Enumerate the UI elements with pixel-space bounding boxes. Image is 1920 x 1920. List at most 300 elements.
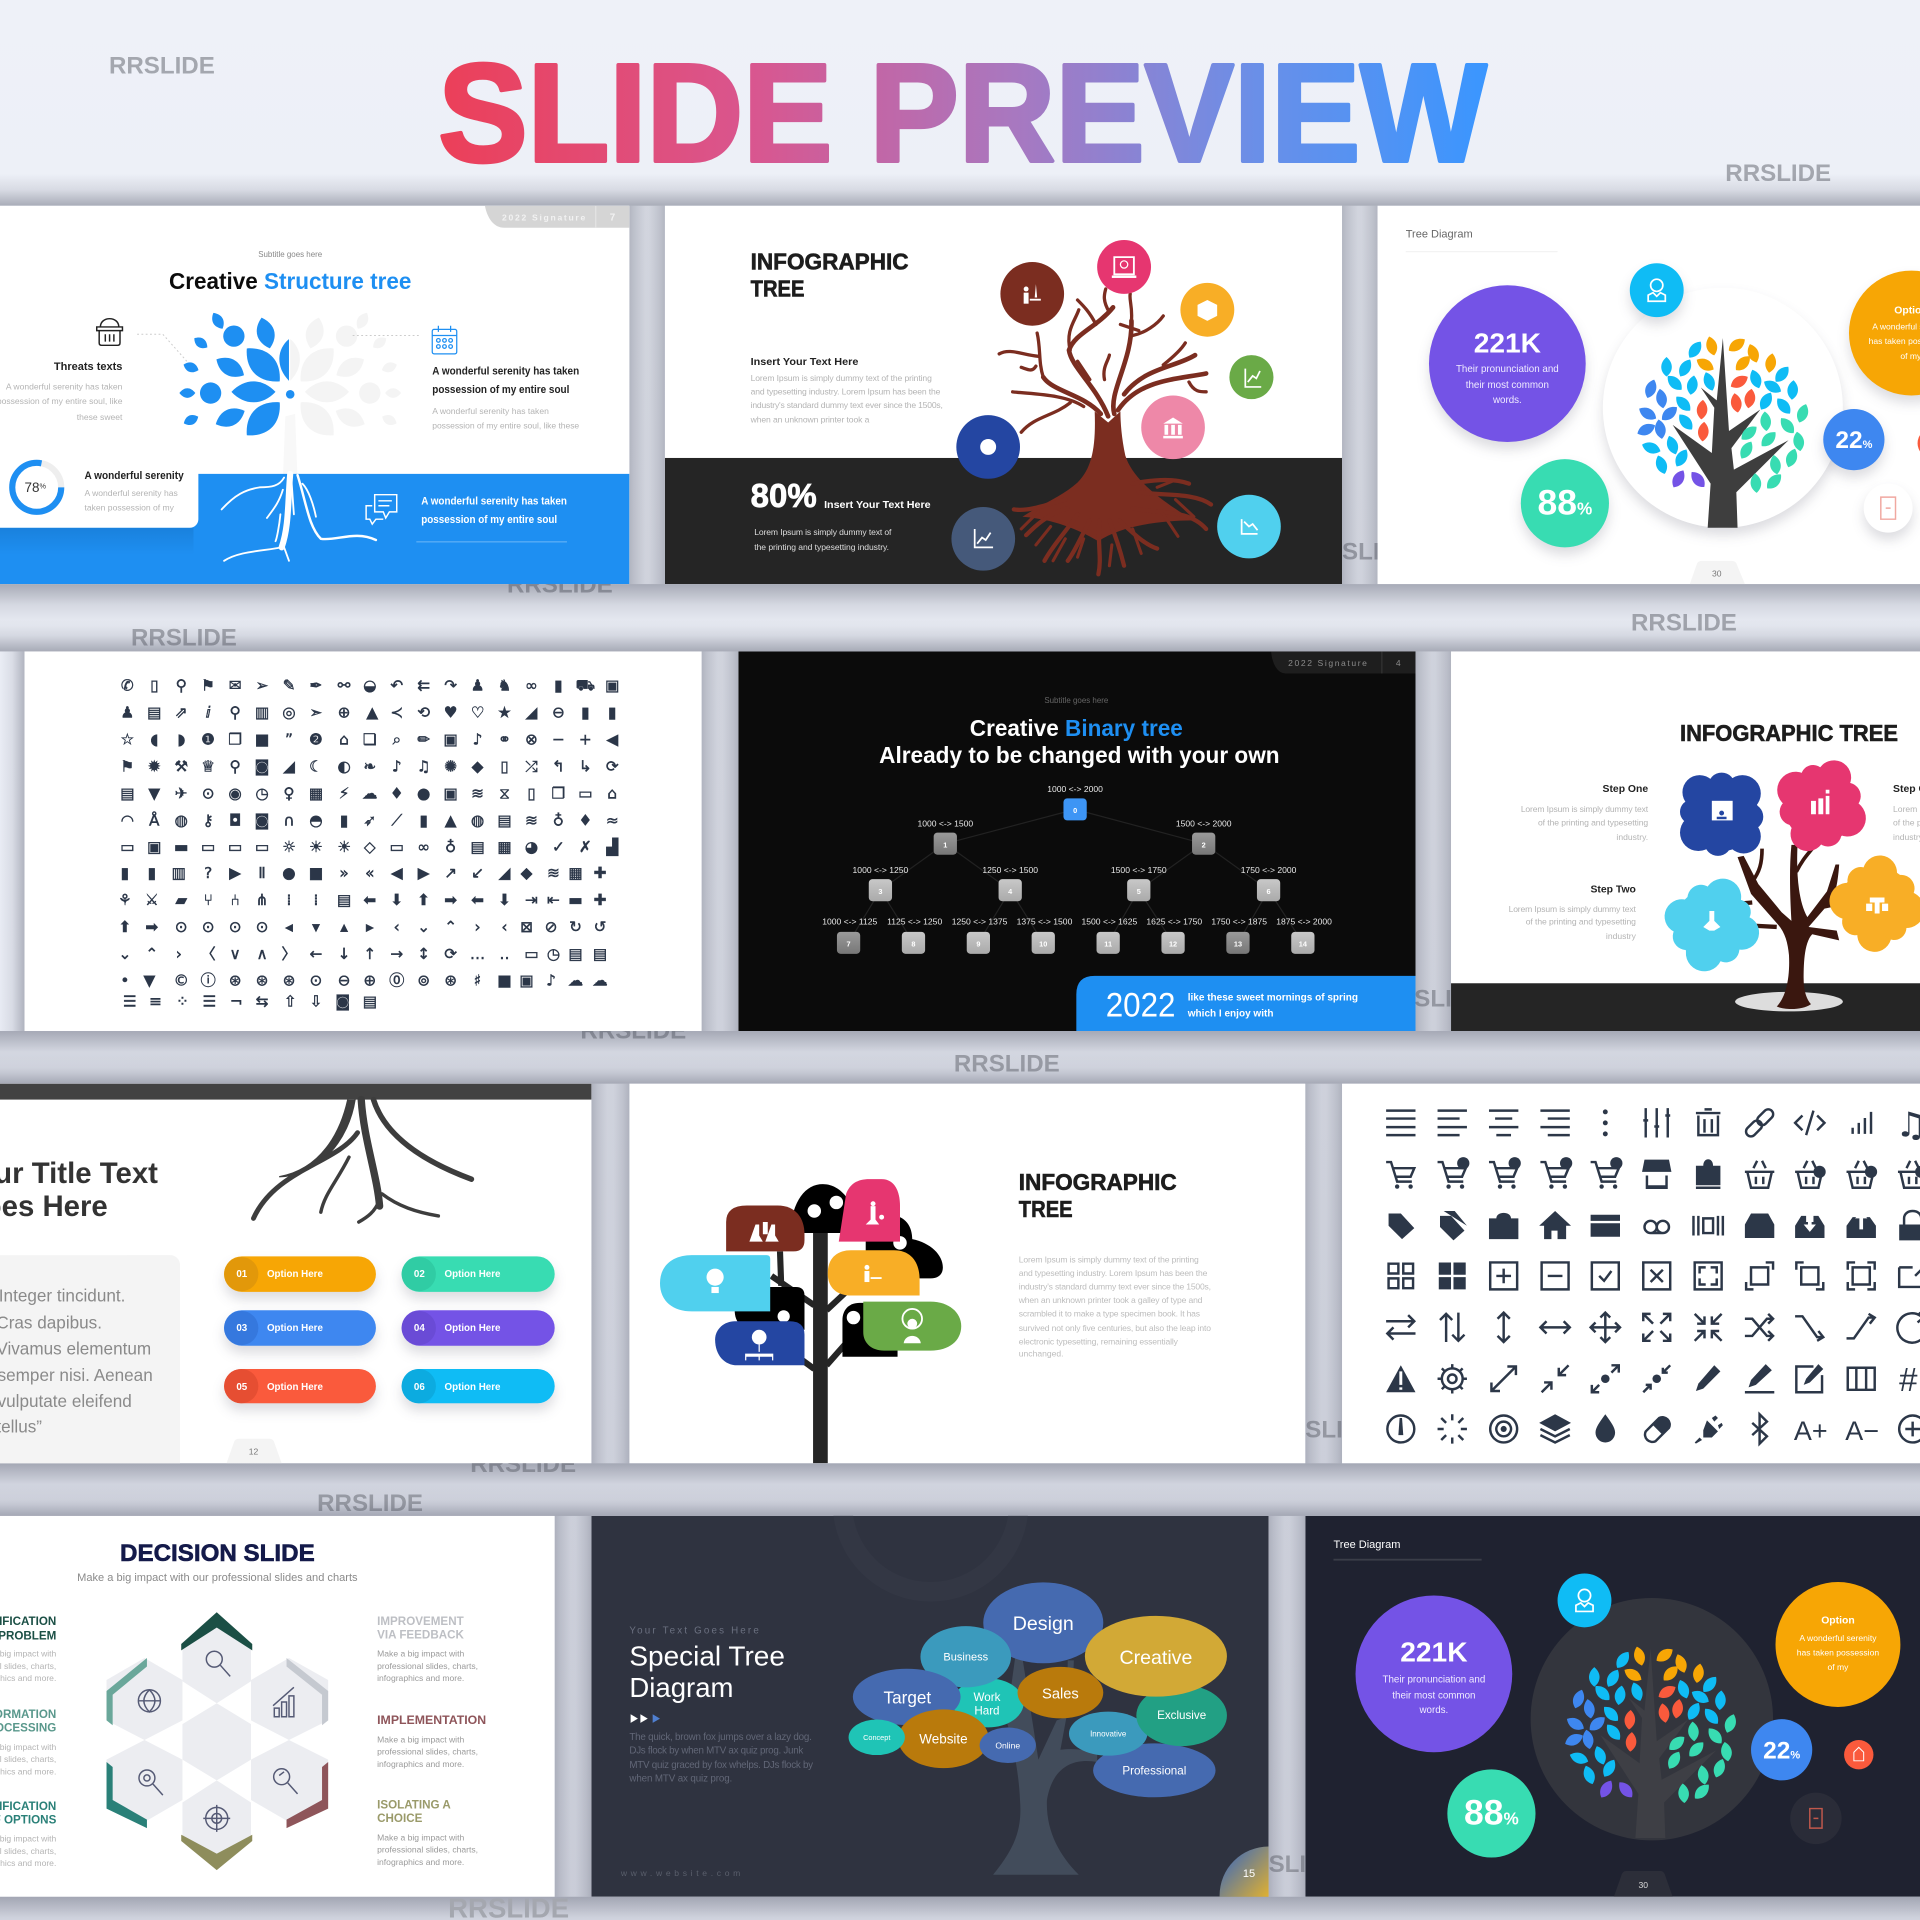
right column text: professional slides, charts,: [377, 1747, 478, 1757]
binary tree labels: 1000 <-> 1500: [917, 819, 973, 829]
quote card: Integer tincidunt.: [0, 1286, 125, 1306]
black leaf lower right: [842, 1303, 898, 1357]
step right text: [1893, 784, 1920, 842]
card: 78 percent: 78: [24, 480, 39, 495]
page tab: 12: [249, 1447, 258, 1457]
pill 05: 05: [236, 1382, 248, 1393]
right column text: ISOLATING A: [377, 1799, 451, 1812]
text block: survived not only five centuries, but also the leap into: [1019, 1323, 1211, 1333]
quote card: Vivamus elementum: [0, 1338, 151, 1358]
icon grid: •▼©ⓘ⊛⊛⊛⊙⊖⊕⓪⊚⊛♯■▣♪☁☁: [120, 972, 608, 990]
icon grid: ◠Å◍⚷◘◙∩◓▮➶⟋▮▲◍▤≋♁♦≈: [121, 810, 619, 829]
circle: brown: [1000, 262, 1064, 326]
stat: 88 percent: 88%: [1464, 1792, 1519, 1832]
binary tree nodes: 10: [1039, 940, 1047, 949]
text block: and typesetting industry. Lorem Ipsum has been the: [751, 386, 941, 396]
slide tab: [485, 206, 629, 228]
pill 02: [402, 1256, 555, 1292]
blue and grey leaves: [179, 310, 401, 444]
text: serenity: possession of my entire soul, like these: [432, 421, 579, 431]
text block: industry's standard dummy text ever since the 1500s,: [1019, 1281, 1211, 1291]
stat 80 percent: Lorem Ipsum is simply dummy text of: [754, 527, 892, 537]
panel: small icon grid slide: [24, 651, 702, 1031]
stat: 221K: 221K: [1400, 1637, 1468, 1668]
callout 2022: which I enjoy with: [1187, 1008, 1273, 1019]
icon grid: ▭▣▬▭▭▭☼☀☀◇▭∞♁▤▦◕✓✗▟: [120, 837, 618, 856]
callout 2022: 2022: [1106, 986, 1176, 1024]
icon row 4: [1389, 1262, 1920, 1289]
text: kicker: Your Text Goes Here: [629, 1625, 760, 1636]
heading: [1019, 1169, 1177, 1222]
bubble: professional: Professional: [1122, 1764, 1186, 1777]
option pills: [224, 1256, 555, 1403]
watermarks: SLI: [1342, 539, 1380, 566]
stat 80 percent: Insert Your Text Here: [824, 500, 931, 511]
binary tree labels: 1000 <-> 2000: [1047, 784, 1103, 794]
bubble: online: Online: [995, 1741, 1020, 1751]
binary tree labels: 1250 <-> 1500: [982, 865, 1038, 875]
callout 2022: [1076, 976, 1416, 1031]
page corner: 15: [1243, 1868, 1255, 1880]
icon: magnifier left: [139, 1770, 163, 1795]
text block: DJs flock by when MTV ax quiz prog. Junk: [629, 1745, 803, 1756]
icon grid: ⌄⌃›〈∨∧〉←↓↑→↕⟳…‥▭◷▤▤: [118, 945, 607, 963]
binary tree nodes: 7: [847, 940, 851, 949]
leaf: green: [863, 1302, 961, 1351]
watermarks: RRSLIDE: [507, 572, 613, 599]
text block: Insert Your Text Here: [751, 357, 859, 368]
bubble: work hard: [953, 1678, 1024, 1727]
right column text: infographics and more.: [377, 1857, 464, 1867]
right column text: infographics and more.: [377, 1759, 464, 1769]
heading: TREE: [751, 275, 804, 301]
binary tree labels: 1875 <-> 2000: [1276, 916, 1332, 926]
panel: infographic tree blobs slide: [1451, 651, 1920, 1031]
pill 02: 02: [414, 1269, 425, 1280]
bubble: creative: [1085, 1616, 1227, 1697]
blob: navy: [1680, 773, 1763, 856]
text: threats: these sweet: [77, 412, 123, 422]
bubble: sales: [1018, 1667, 1103, 1718]
binary tree nodes: 3: [878, 887, 882, 896]
heading: INFOGRAPHIC: [1019, 1169, 1177, 1195]
step two text: industry: [1606, 931, 1637, 941]
panel: decision slide: [0, 1516, 555, 1897]
bubble: target: [853, 1669, 961, 1725]
stat: 221K: their most common: [1466, 380, 1549, 391]
icon: target: [203, 1805, 230, 1832]
pill 02: Option Here: [444, 1269, 501, 1280]
binary tree labels: 1750 <-> 1875: [1211, 916, 1267, 926]
arrows: [631, 1714, 648, 1723]
text block: [1018, 1254, 1211, 1359]
panel: large icon grid slide: [1342, 1084, 1920, 1463]
card: 78 percent: A wonderful serenity: [84, 470, 184, 482]
binary tree nodes: [837, 798, 1314, 954]
stat 80 percent: the printing and typesetting industry.: [754, 542, 889, 552]
leaf: yellow: [828, 1250, 920, 1296]
quote card: vulputate eleifend: [0, 1391, 132, 1411]
watermarks: RRSLIDE: [1631, 610, 1737, 637]
stat: 88 percent: 88%: [1538, 482, 1592, 522]
text: band: A wonderful serenity has taken: [421, 495, 567, 507]
right column text: IMPLEMENTATION: [377, 1714, 486, 1727]
option circle: of my: [1827, 1662, 1849, 1672]
right column text: professional slides, charts,: [377, 1845, 478, 1855]
watermarks: RRSLIDE: [109, 52, 215, 79]
subtitle: Subtitle goes here: [258, 250, 323, 259]
heading: Already to be changed with your own: [879, 742, 1280, 768]
binary tree nodes: 0: [1073, 806, 1077, 815]
panel: binary tree slide: [738, 651, 1416, 1031]
label: Tree Diagram: [1333, 1539, 1400, 1551]
stat: 221K: their most common: [1392, 1690, 1475, 1701]
card: 78 percent: taken possession of my: [84, 503, 175, 513]
heading: INFOGRAPHIC TREE: [1680, 720, 1898, 746]
step two text: [1509, 885, 1637, 941]
bubble: business: Business: [943, 1651, 989, 1663]
page tab: 30: [1638, 1880, 1648, 1890]
bubble: website: Website: [919, 1732, 968, 1747]
big circle with tree: [1598, 336, 1847, 540]
slide tab: 2022 Signature: [502, 212, 587, 222]
card: 78 percent: A wonderful serenity has: [84, 488, 178, 498]
title: SLIDE PREVIEW: [438, 35, 1487, 191]
watermarks: SLI: [1305, 1417, 1343, 1444]
circle: green: [1229, 355, 1273, 399]
tree stem: [771, 1233, 845, 1463]
icon grid: [118, 677, 619, 1011]
bubble: work hard: Work: [973, 1691, 1001, 1704]
icon: chat: [366, 495, 397, 524]
stat: 22 percent: [1823, 409, 1884, 470]
watermarks: RRSLIDE: [470, 1451, 576, 1478]
icon grid: ♟▤⇗ⅈ⚲▥◎➣⊕▲≺⟲♥♡★◢⊖▮▮: [120, 704, 616, 722]
bubble: work hard: Hard: [974, 1704, 1000, 1717]
text: band: [421, 495, 567, 526]
icon row 7: A−: [1845, 1416, 1879, 1446]
pill 04: [402, 1310, 555, 1346]
watermarks: RRSLIDE: [317, 1490, 423, 1517]
blob: yellow: [1818, 845, 1920, 962]
circle: slate: [951, 507, 1015, 571]
website text: www.website.com: [620, 1868, 744, 1878]
icon row 5: [1386, 1313, 1920, 1343]
binary tree nodes: 4: [1008, 887, 1013, 896]
icon grid: ✆▯⚲⚑✉➢✎✒⚯◒↶⇇↷♟♞∞▮⛟▣: [121, 677, 619, 695]
stat: 88 percent: [1521, 459, 1609, 547]
icon row 2: [1386, 1157, 1920, 1189]
black leaf right: [866, 1215, 943, 1278]
page tab: [1690, 561, 1745, 584]
binary tree labels: 1125 <-> 1250: [887, 916, 942, 926]
leaf: navy: [715, 1321, 804, 1365]
binary tree labels: 1000 <-> 1250: [853, 865, 908, 875]
right column text: IMPROVEMENT: [377, 1615, 464, 1628]
dotted connector left: [137, 334, 187, 362]
bubble: design: [983, 1582, 1103, 1663]
text: serenity: A wonderful serenity has taken: [432, 406, 549, 416]
left column text: [0, 1615, 57, 1868]
icon circle: red: [1844, 1740, 1873, 1769]
panel: tree diagram light slide: [1378, 206, 1920, 584]
pill 06: [402, 1369, 555, 1403]
dotted connector right: [352, 335, 419, 336]
stat: 88 percent: [1447, 1769, 1536, 1858]
watermarks: SLI: [1414, 986, 1452, 1013]
binary tree nodes: 9: [976, 940, 980, 949]
subheading: Make a big impact with our professional slides and charts: [77, 1572, 358, 1584]
bubble: concept: Concept: [863, 1733, 890, 1742]
bubble: creative: Creative: [1119, 1647, 1192, 1669]
page tab: 30: [1712, 569, 1722, 579]
bubble: target: Target: [884, 1687, 931, 1707]
option circle: A wonderful serenity: [1799, 1633, 1877, 1643]
option circle: [1776, 1582, 1900, 1707]
blob: cyan: [1655, 868, 1769, 981]
tree trunk: [1738, 845, 1839, 1009]
binary tree nodes: 1: [943, 840, 947, 849]
pill 03: [224, 1310, 376, 1346]
stat: 221K: Their pronunciation and: [1456, 364, 1559, 375]
icon row 1: [1386, 1105, 1920, 1145]
stat: 221K: [1356, 1596, 1512, 1752]
watermarks: RRSLIDE: [131, 624, 237, 651]
step one text: of the printing and typesetting: [1538, 817, 1648, 827]
heading: INFOGRAPHIC: [751, 248, 909, 274]
icon circle: white: [1864, 484, 1913, 533]
heading: [750, 253, 908, 297]
icon: magnifier right: [274, 1769, 298, 1794]
binary tree labels: 1625 <-> 1750: [1146, 916, 1202, 926]
pill 05: Option Here: [267, 1382, 323, 1393]
panel: creative structure tree slide: [0, 206, 629, 584]
panel: tree diagram dark slide: [1305, 1516, 1920, 1897]
text block: unchanged.: [1019, 1349, 1064, 1359]
slide tab: [1271, 651, 1416, 673]
right column text: professional slides, charts,: [377, 1661, 478, 1671]
pill 01: Option Here: [267, 1269, 323, 1280]
stat: 22 percent: 22%: [1763, 1737, 1800, 1764]
text: threats: Threats texts: [54, 361, 122, 373]
heading: Diagram: [629, 1672, 733, 1703]
option circle: Option: [1821, 1616, 1855, 1627]
stat: 22 percent: 22%: [1835, 427, 1873, 454]
tree base shadow: [1735, 992, 1843, 1011]
text block: electronic typesetting, remaining essentially: [1019, 1336, 1179, 1346]
text block: Lorem Ipsum is simply dummy text of the printing: [1019, 1254, 1199, 1264]
text block: [628, 1732, 813, 1785]
right column text: Make a big impact with: [377, 1832, 464, 1842]
text: serenity: [432, 366, 579, 431]
bubble: professional: [1093, 1743, 1216, 1797]
watermarks: RRSLIDE: [1725, 160, 1831, 187]
grey tree trunk: [283, 414, 298, 480]
icon circle: dark: [1790, 1793, 1842, 1844]
circle: pink: [1097, 240, 1151, 294]
bubble: website: [898, 1709, 989, 1768]
slide tab: 4: [1396, 658, 1401, 668]
icon row 3: [1389, 1211, 1920, 1240]
heading: TREE: [1019, 1196, 1073, 1222]
right column text: VIA FEEDBACK: [377, 1628, 465, 1641]
white roots: [222, 474, 376, 561]
text block: Lorem Ipsum is simply dummy text of the printing: [751, 373, 932, 383]
pill 06: Option Here: [444, 1382, 501, 1393]
binary tree labels: 1500 <-> 1625: [1082, 916, 1137, 926]
bubble: exclusive: Exclusive: [1157, 1709, 1206, 1722]
hexagon cluster: [107, 1614, 328, 1869]
binary tree labels: 1000 <-> 1125: [822, 916, 878, 926]
right column text: infographics and more.: [377, 1673, 464, 1683]
stat: 221K: words.: [1418, 1705, 1448, 1716]
binary tree connectors: [849, 809, 1303, 943]
pill 03: 03: [236, 1323, 248, 1334]
pill 01: 01: [236, 1269, 248, 1280]
text: serenity: A wonderful serenity has taken: [432, 366, 579, 378]
icon: basket: [97, 319, 122, 345]
watermarks: RRSLIDE: [954, 1050, 1060, 1077]
text: band: possession of my entire soul: [421, 514, 557, 526]
binary tree nodes: 5: [1137, 887, 1141, 896]
heading: Creative Binary tree: [970, 715, 1183, 741]
icon row 7: A+: [1794, 1416, 1828, 1446]
bubble: exclusive: [1136, 1685, 1227, 1746]
bubble: online: [980, 1728, 1036, 1763]
right column text: [377, 1615, 486, 1867]
heading: Special Tree: [629, 1640, 785, 1671]
panel: title text roots slide: [0, 1084, 591, 1476]
page corner: [1220, 1847, 1318, 1920]
pill 04: Option Here: [444, 1323, 501, 1334]
icon grid: ☰≡⁘☰¬⇆⇧⇩◙▤: [123, 993, 377, 1011]
binary tree nodes: 6: [1267, 887, 1271, 896]
right column text: Make a big impact with: [377, 1734, 464, 1744]
icon grid: ▮▮▥?▶Ⅱ●■»«◀▶↗↙◢◆≋▦✚: [121, 864, 606, 882]
quote card: [0, 1255, 180, 1476]
subtitle: Subtitle goes here: [1044, 696, 1109, 705]
pill 05: [224, 1369, 376, 1403]
text: serenity: possession of my entire soul: [432, 384, 569, 396]
bubble: business: [920, 1626, 1011, 1687]
text block: when an unknown printer took a: [750, 414, 870, 424]
right column text: Make a big impact with: [377, 1649, 464, 1659]
option circle: has taken possession: [1797, 1648, 1879, 1658]
panel: bubble tree slide: [629, 1084, 1305, 1463]
text block: The quick, brown fox jumps over a lazy dog.: [629, 1732, 812, 1743]
icon grid: ⚘⚔▰⑂⑃⋔⁞⁞▤⬅⬇⬆➡⬅⬇⇥⇤▬✚: [118, 891, 606, 909]
stat: 221K: words.: [1492, 395, 1522, 406]
icon: bars: [273, 1687, 294, 1717]
card: 78 percent: %: [39, 482, 46, 491]
quote card: semper nisi. Aenean: [0, 1365, 153, 1385]
panel: special tree diagram slide: [591, 1416, 1318, 1920]
circle: navy: [956, 415, 1020, 479]
icon grid: ▤▼✈⊙◉◷♀▦⚡☁♦●▣≋⧖▯❐▭⌂: [120, 784, 617, 802]
leaf: brown: [726, 1206, 804, 1251]
heading: [879, 715, 1280, 768]
pill 04: 04: [414, 1323, 425, 1334]
bubble: innovative: [1069, 1712, 1147, 1756]
callout 2022: like these sweet mornings of spring: [1188, 992, 1358, 1003]
text block: [750, 357, 943, 424]
step two text: of the printing and typesetting: [1526, 916, 1636, 926]
leaf: pink: [839, 1179, 900, 1242]
step one text: Step One: [1603, 784, 1648, 795]
binary tree nodes: 14: [1299, 940, 1308, 949]
text: threats: A wonderful serenity has taken: [6, 381, 123, 391]
circle: rose: [1141, 396, 1205, 459]
bubble: innovative: Innovative: [1090, 1729, 1127, 1738]
icon grid: ⚑✹⚒♕⚲◙◢☾◐❧♪♫✺◆▯⤮↰↳⟳: [120, 757, 619, 775]
stat 80 percent: 80%: [751, 478, 817, 515]
red circle edge: [1918, 435, 1920, 452]
binary tree nodes: 8: [911, 940, 916, 949]
bubble: sales: Sales: [1042, 1686, 1079, 1702]
icon grid: ☆◖◗❶❐■”❷⌂❏⌕✏▣♪⚭⊗−+◀: [120, 730, 618, 748]
text block: MTV quiz graced by fox whelps. DJs flock by: [629, 1760, 813, 1771]
binary tree nodes: 2: [1202, 840, 1206, 849]
text block: scrambled it to make a type specimen book. It has: [1019, 1308, 1200, 1318]
bubble: concept: [849, 1720, 905, 1755]
pill 03: Option Here: [267, 1323, 323, 1334]
step two text: Lorem Ipsum is simply dummy text: [1509, 904, 1637, 914]
black leaf left: [735, 1287, 804, 1330]
pill 06: 06: [414, 1382, 425, 1393]
step one text: Lorem Ipsum is simply dummy text: [1521, 804, 1649, 814]
step one text: [1521, 784, 1649, 842]
watermarks: RRSLIDE: [580, 1017, 686, 1044]
binary tree labels: 1500 <-> 1750: [1111, 865, 1167, 875]
heading: [0, 1157, 158, 1223]
page tab: [227, 1439, 282, 1463]
blob: pink: [1767, 752, 1874, 859]
right column text: CHOICE: [377, 1812, 423, 1825]
stat 80 percent: [751, 478, 931, 552]
icon row 6: [1386, 1362, 1918, 1399]
black leaf top: [790, 1184, 856, 1233]
option circle: [1849, 271, 1920, 396]
binary tree nodes: 13: [1234, 940, 1242, 949]
step one text: industry.: [1616, 832, 1648, 842]
heading: DECISION SLIDE: [120, 1540, 315, 1567]
page tab: [1614, 1871, 1673, 1897]
icon circle: user: [1558, 1573, 1611, 1627]
text block: industry's standard dummy text ever since the 1500s,: [751, 400, 943, 410]
big circle with tree: [1531, 1598, 1773, 1840]
label: Tree Diagram: [1406, 229, 1473, 241]
binary tree nodes: 11: [1104, 940, 1112, 949]
icon: globe: [138, 1690, 160, 1712]
icon: magnifier top: [206, 1651, 230, 1676]
blue band: [0, 474, 629, 584]
pill 01: [224, 1256, 376, 1292]
text: threats: possession of my entire soul, like: [0, 396, 123, 406]
text block: and typesetting industry. Lorem Ipsum has been the: [1019, 1268, 1208, 1278]
leaf: cyan: [660, 1255, 770, 1311]
stat: 221K: 221K: [1474, 328, 1542, 359]
binary tree labels: 1500 <-> 2000: [1176, 819, 1232, 829]
slide tab: 2022 Signature: [1288, 658, 1369, 668]
binary tree labels: [822, 784, 1332, 926]
bubble: design: Design: [1013, 1613, 1074, 1635]
slide tab: 7: [610, 212, 616, 223]
text: threats: [0, 361, 123, 422]
binary tree labels: 1250 <-> 1375: [952, 916, 1008, 926]
binary tree labels: 1375 <-> 1500: [1017, 916, 1073, 926]
watermarks: SLI: [1269, 1851, 1306, 1878]
binary tree labels: 1750 <-> 2000: [1241, 865, 1297, 875]
